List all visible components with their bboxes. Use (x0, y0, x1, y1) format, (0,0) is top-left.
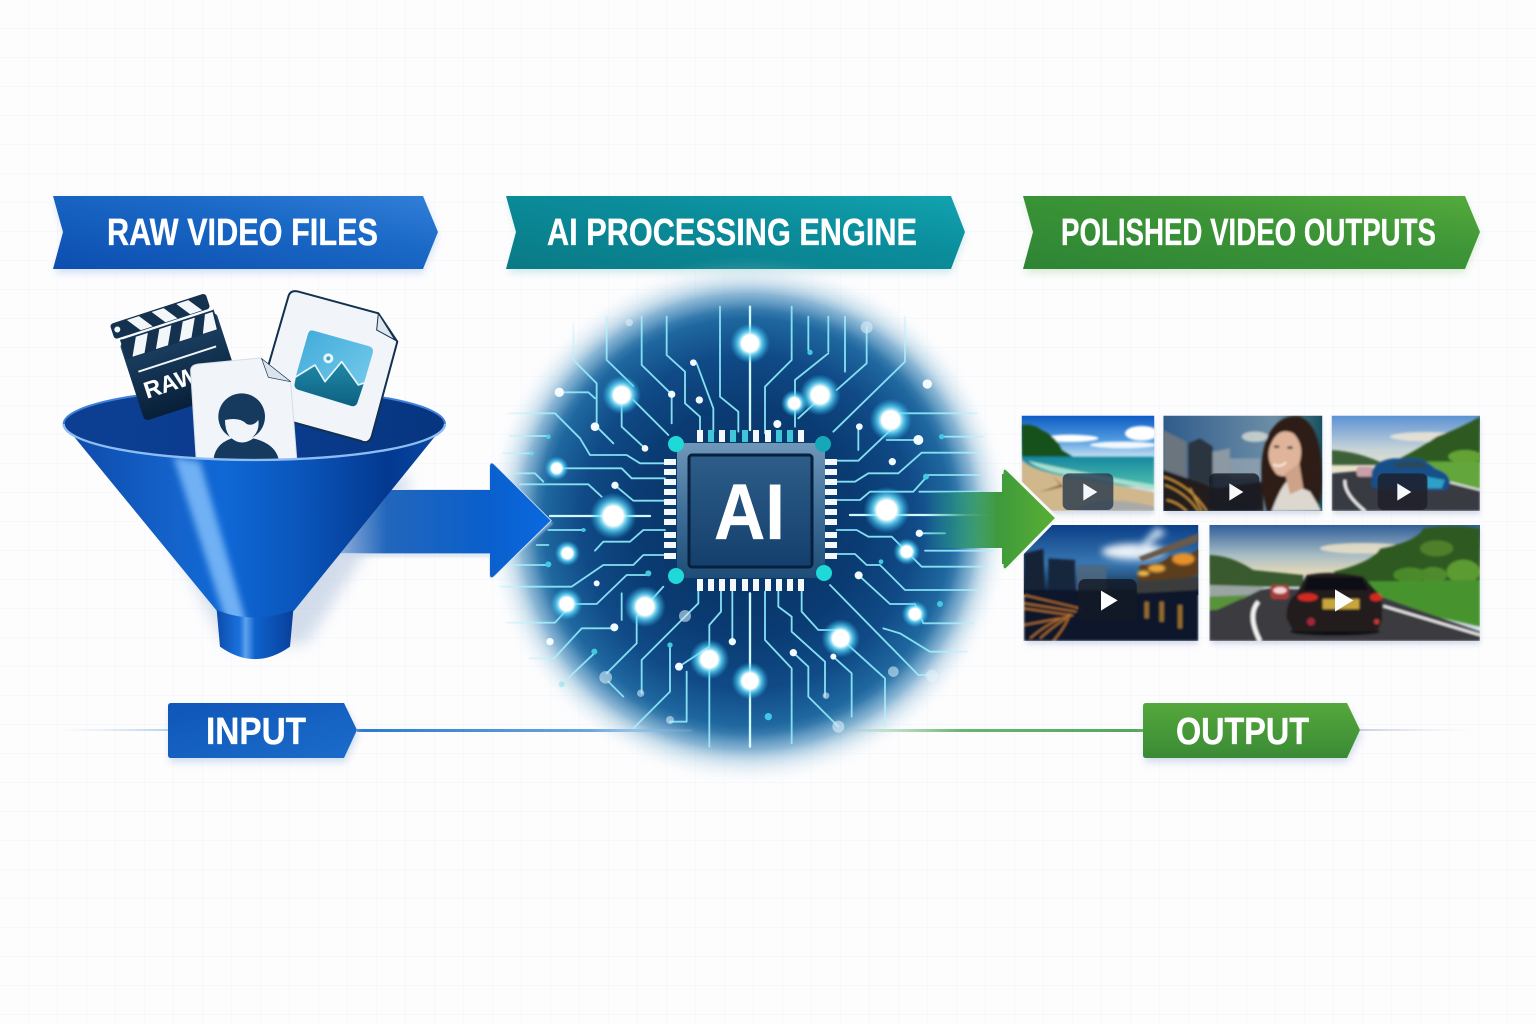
funnel cone (64, 424, 445, 623)
thumbnail shadows (1023, 419, 1480, 644)
label tag: output: OUTPUT (1176, 711, 1309, 753)
heading banner: polished video outputs (1023, 196, 1480, 273)
person file icon (191, 358, 297, 467)
funnel shadow (140, 477, 413, 647)
thumbnail: city bridge at night (1024, 525, 1198, 641)
funnel with input files (64, 291, 553, 659)
arrow: engine to outputs (925, 468, 1057, 570)
clapperboard icon (110, 292, 241, 422)
circuit nodes (530, 319, 944, 733)
funnel rim highlight (64, 424, 445, 460)
thumbnail: city portrait (1163, 416, 1322, 511)
heading banner: raw video files (53, 196, 438, 273)
heading banner: raw video files: RAW VIDEO FILES (107, 212, 378, 254)
timeline line: output side (840, 729, 1475, 732)
heading banner: AI processing engine: AI PROCESSING ENGINE (547, 212, 917, 254)
thumbnail: beach (1022, 416, 1158, 511)
AI chip (664, 430, 837, 591)
chip body (677, 443, 825, 578)
label tag: output (1143, 703, 1361, 762)
label tag: input (168, 703, 358, 762)
chip inner panel (689, 455, 812, 567)
circuit traces (500, 307, 993, 747)
clapper label: RAW (140, 362, 201, 403)
polished video output thumbnails (1022, 416, 1482, 644)
chip pins (664, 430, 837, 591)
glow backdrop (500, 262, 1000, 776)
label tag: input: INPUT (206, 711, 306, 753)
thumbnail: road dark car (1209, 525, 1480, 641)
image file icon (255, 291, 397, 442)
chip corner dots (668, 436, 832, 584)
funnel spout (217, 610, 293, 659)
heading banner: AI processing engine (506, 196, 965, 273)
picture thumbnail (294, 330, 373, 407)
chip label: AI (714, 467, 785, 556)
thumbnail: road blue car (1332, 416, 1482, 511)
AI processing engine: circuit glow (499, 262, 1000, 776)
arrow: funnel to engine (338, 463, 553, 578)
timeline line: input side (60, 729, 692, 732)
funnel interior (64, 388, 445, 460)
